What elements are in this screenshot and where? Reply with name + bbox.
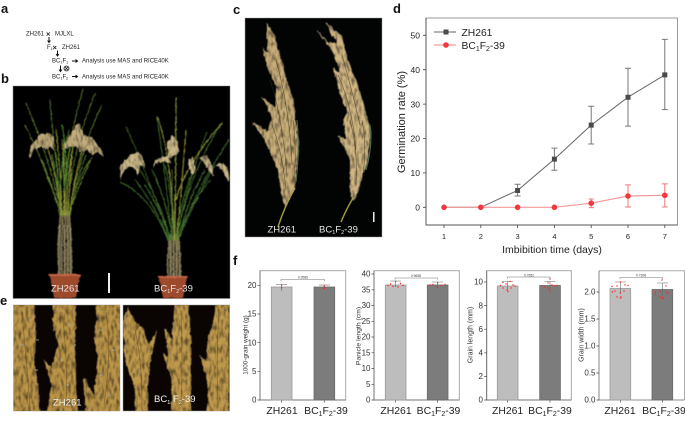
chart: panicle length: 5 <box>366 380 371 389</box>
chart: 1000-grain weight: -39 <box>333 406 348 417</box>
panel d: germination line chart <box>396 18 678 256</box>
scale bar <box>373 212 374 222</box>
panel a: breeding scheme: × <box>46 30 51 38</box>
y axis title: Germination rate (%) <box>396 71 408 173</box>
chart: grain width: 0.7308 <box>636 274 646 278</box>
panel a: breeding scheme: 1 <box>66 60 68 64</box>
chart: 1000-grain weight: 2 <box>329 411 333 418</box>
chart: panicle length <box>356 270 461 418</box>
chart: 1000-grain weight: 10 <box>248 338 257 347</box>
chart: grain width: 0.5 <box>584 369 596 378</box>
y tick labels: 30 <box>411 99 420 109</box>
legend: 2 <box>486 46 490 53</box>
x tick labels: 5 <box>589 232 593 241</box>
chart: grain length: 6 <box>479 325 484 334</box>
chart: panicle length: 15 <box>362 348 371 358</box>
panel a: breeding scheme: F <box>47 45 51 51</box>
chart: grain width: F <box>661 406 667 417</box>
y tick labels: 20 <box>411 134 420 144</box>
panel a: breeding scheme: 1 <box>60 60 62 64</box>
label BC1F2-39: 2 <box>179 400 182 406</box>
label BC1F2-39: BC <box>154 394 167 405</box>
chart: 1000-grain weight: 0 <box>252 396 257 405</box>
chart: panicle length: BC <box>417 406 431 417</box>
chart: 1000-grain weight: F <box>323 406 329 417</box>
chart: panicle length: 20 <box>362 333 371 342</box>
chart: grain width: Grain width (mm) <box>578 308 586 362</box>
x tick labels: 6 <box>626 232 630 241</box>
panel a: breeding scheme: 2 <box>66 76 68 80</box>
chart: grain width <box>578 271 685 418</box>
series BC1F2-39 <box>441 184 668 210</box>
label BC1F2-39: 1 <box>167 400 170 406</box>
chart: grain length: 1 <box>543 411 547 418</box>
panel a: breeding scheme: BC <box>52 58 60 64</box>
panel a: breeding scheme: F <box>62 58 66 64</box>
y tick labels: 40 <box>411 65 420 75</box>
series ZH261 <box>444 39 668 207</box>
y tick labels: 50 <box>411 30 420 40</box>
label BC1F2-39: 2 <box>176 289 179 295</box>
chart: grain width: 2 <box>667 411 671 418</box>
panel a: breeding scheme: × <box>52 43 58 52</box>
panel a: breeding scheme: MJLXL <box>55 32 74 38</box>
chart: grain length: ZH261 <box>492 406 523 417</box>
chart: grain width: 1.0 <box>584 342 596 351</box>
chart: grain length: F <box>547 406 553 417</box>
chart: grain length: 2 <box>553 411 557 418</box>
chart: 1000-grain weight: 1 <box>319 411 323 418</box>
chart: panicle length: 40 <box>362 270 371 279</box>
chart: grain length: 2 <box>479 372 484 381</box>
legend: ZH261 <box>462 28 493 39</box>
panicle BC1F2-39 <box>316 22 371 222</box>
x tick labels: 4 <box>552 232 556 241</box>
panel label f: f <box>233 253 238 268</box>
chart: grain width: 0.0 <box>584 396 596 405</box>
legend: F <box>480 41 486 52</box>
legend <box>434 28 505 53</box>
panel c: panicles photo <box>245 18 382 237</box>
legend: -39 <box>490 41 505 52</box>
pots <box>49 274 188 298</box>
scale bar <box>108 273 110 293</box>
panel a: breeding scheme: BC <box>52 74 60 80</box>
chart: panicle length: 2 <box>441 411 445 418</box>
panel e: grain close-up BC1F2-39 <box>123 300 230 416</box>
panel a: breeding scheme: ZH261 <box>26 32 45 38</box>
chart: grain length: -39 <box>557 406 572 417</box>
panel label a: a <box>1 1 9 16</box>
chart: grain width: 1 <box>657 411 661 418</box>
panicle ZH261 <box>253 23 299 227</box>
x tick labels <box>442 232 667 241</box>
label BC1F2-39: F <box>170 284 176 294</box>
chart: grain length: 10 <box>474 278 484 287</box>
x tick labels: 1 <box>442 232 446 241</box>
label ZH261: ZH261 <box>268 224 296 236</box>
chart: 1000-grain weight: BC <box>304 406 319 417</box>
panel a: breeding scheme: 1 <box>51 47 53 51</box>
chart: grain length <box>468 271 572 418</box>
chart: 1000-grain weight <box>242 271 348 418</box>
y tick labels: 0 <box>415 202 420 212</box>
label BC1F2-39: 1 <box>332 230 335 236</box>
chart: 1000-grain weight: 20 <box>248 281 257 290</box>
panel a: breeding scheme: F <box>62 74 66 80</box>
plant: ZH261 <box>25 89 104 275</box>
chart: grain width: ZH261 <box>604 406 636 417</box>
panel a: breeding scheme: Analysis use MAS and RICE40K <box>82 58 169 64</box>
label BC1F2-39: 2 <box>341 230 344 236</box>
chart: panicle length: 35 <box>362 286 371 294</box>
panel a: breeding scheme <box>26 30 169 80</box>
plant: BC1F2-39 <box>120 98 229 277</box>
chart: panicle length: 0.9698 <box>411 274 421 278</box>
legend: 1 <box>476 46 480 53</box>
label BC1F2-39: BC <box>319 224 332 236</box>
chart: grain length: 0 <box>479 396 484 405</box>
x axis title: Imbibition time (days) <box>502 244 602 256</box>
axis ticks <box>423 35 665 228</box>
chart: grain width: BC <box>642 406 657 417</box>
label BC1F2-39: F <box>335 224 341 236</box>
chart: 1000-grain weight: ZH261 <box>266 406 298 417</box>
chart: panicle length: ZH261 <box>380 406 412 417</box>
chart: panicle length: F <box>435 406 441 417</box>
chart: 1000-grain weight: 5 <box>252 367 257 376</box>
chart: panicle length: 10 <box>362 364 371 373</box>
panel label b: b <box>1 71 9 86</box>
panel label d: d <box>393 1 401 16</box>
chart: panicle length: 1 <box>431 411 435 418</box>
x tick labels: 3 <box>516 232 520 241</box>
chart: grain length: 0.7652 <box>524 274 534 278</box>
label BC1F2-39: BC <box>154 284 167 294</box>
panel label e: e <box>0 293 7 308</box>
panel e: grain close-up ZH261 <box>13 304 120 412</box>
panel a: breeding scheme: 1 <box>60 76 62 80</box>
chart: grain length: BC <box>528 406 543 417</box>
label BC1F2-39: -39 <box>182 394 196 405</box>
x tick labels: 2 <box>479 232 483 241</box>
label BC1F2-39: F <box>170 394 179 405</box>
chart: grain length: 8 <box>479 301 484 310</box>
legend: BC <box>462 41 476 52</box>
chart: panicle length: 30 <box>362 301 371 310</box>
panel b: whole plants photo <box>13 86 230 298</box>
chart: panicle length: Panicle length (cm) <box>356 307 362 365</box>
chart: grain width: 2.0 <box>584 288 596 297</box>
chart: 1000-grain weight: 0.9585 <box>298 276 308 280</box>
chart: grain length: Grain length (mm) <box>468 307 474 363</box>
panel label c: c <box>233 2 240 17</box>
panel a: breeding scheme: ZH261 <box>62 45 81 51</box>
chart: panicle length: -39 <box>445 406 461 417</box>
chart: 1000-grain weight: 15 <box>248 310 257 319</box>
chart: grain length: 4 <box>479 348 484 358</box>
label BC1F2-39: -39 <box>344 224 358 236</box>
label ZH261: ZH261 <box>51 284 80 294</box>
chart: panicle length: 25 <box>362 317 371 326</box>
chart: panicle length: 0 <box>366 396 371 405</box>
chart: 1000-grain weight: 1000-grain weight (g) <box>242 315 250 375</box>
label BC1F2-39: 1 <box>167 289 170 295</box>
panel a: breeding scheme: Analysis use MAS and RICE40K <box>82 74 169 80</box>
chart: grain width: 1.5 <box>584 315 596 324</box>
x tick labels: 7 <box>663 232 667 241</box>
y tick labels: 10 <box>411 168 420 178</box>
y tick labels <box>411 30 420 212</box>
label BC1F2-39: -39 <box>179 284 193 294</box>
label ZH261: ZH261 <box>53 398 82 408</box>
